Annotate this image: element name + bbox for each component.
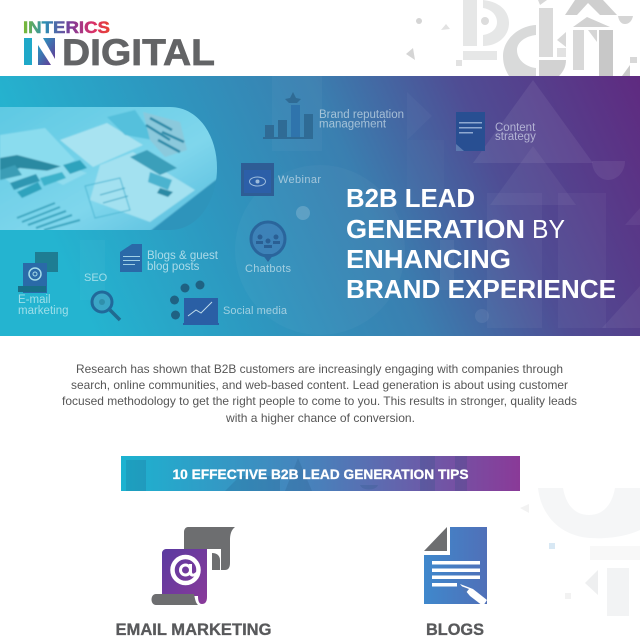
banner title — [346, 183, 616, 304]
icon: blog document — [120, 244, 142, 272]
label: Social media: Social media — [223, 305, 288, 317]
banner title: GENERATION — [346, 214, 525, 244]
logo: DIGITAL wordmark: DIGITAL — [62, 32, 215, 73]
ribbon heading: 10 EFFECTIVE B2B LEAD GENERATION TIPS — [172, 466, 468, 482]
label: Chatbots: Chatbots — [245, 263, 292, 275]
banner title: B2B LEAD — [346, 183, 475, 213]
icon: e-mail scroll — [18, 252, 58, 293]
intro paragraph — [62, 362, 577, 425]
banner decorative shapes — [80, 76, 640, 335]
icon: social media chart — [170, 280, 219, 325]
banner title: ENHANCING — [346, 244, 511, 274]
tips ribbon — [121, 456, 520, 491]
photo: people reviewing charts — [0, 102, 222, 235]
banner background — [0, 76, 640, 336]
intro paragraph: Research has shown that B2B customers are increasingly engaging with companies through — [76, 362, 563, 376]
label: Brand reputation management: management — [319, 118, 387, 130]
intro paragraph: focused methodology to get the right people to come to you. This results in stronger, quality leads — [62, 394, 577, 408]
label: Content strategy: strategy — [495, 131, 536, 143]
label: Webinar: Webinar — [278, 174, 321, 186]
label: Brand reputation management: Brand reputation — [319, 109, 404, 121]
icon: content notepad — [456, 112, 485, 151]
ribbon background — [121, 456, 520, 491]
logo: Interics Digital — [23, 19, 215, 73]
label: Content strategy: Content — [495, 122, 536, 134]
label: E-mail marketing: marketing — [18, 305, 68, 317]
tip: blogs — [424, 527, 487, 639]
hero banner — [0, 76, 640, 336]
intro paragraph: search, online communities, and web-based content. Lead generation is about using customer — [71, 378, 568, 392]
ribbon decorative shapes — [126, 456, 467, 491]
icon: email scroll — [152, 527, 235, 605]
banner title: BY — [532, 214, 565, 244]
tip: email marketing — [116, 527, 272, 639]
decorative shapes: lower right — [520, 488, 640, 616]
label: SEO: SEO — [84, 272, 108, 284]
icon: webinar window — [241, 163, 274, 196]
icon: SEO magnifier — [92, 292, 120, 320]
label: Blogs & guest blog posts: blog posts — [147, 261, 200, 273]
label: Blogs & guest blog posts: Blogs & guest — [147, 250, 219, 262]
intro paragraph: with a higher chance of conversion. — [225, 411, 415, 425]
label: E-mail marketing: E-mail — [18, 294, 51, 306]
heading: Email Marketing: EMAIL MARKETING — [116, 621, 272, 639]
icon: brand reputation bars — [263, 92, 313, 139]
logo: IN mark — [24, 38, 55, 65]
icon: chatbots bubble — [251, 222, 285, 262]
icon: blog document — [424, 527, 487, 606]
logo: coloured INTERICS wordmark: INTERICS — [23, 19, 110, 37]
heading: Blogs: BLOGS — [426, 621, 484, 639]
banner title: BRAND EXPERIENCE — [346, 274, 616, 304]
decorative geometric shapes: top right — [406, 0, 637, 76]
